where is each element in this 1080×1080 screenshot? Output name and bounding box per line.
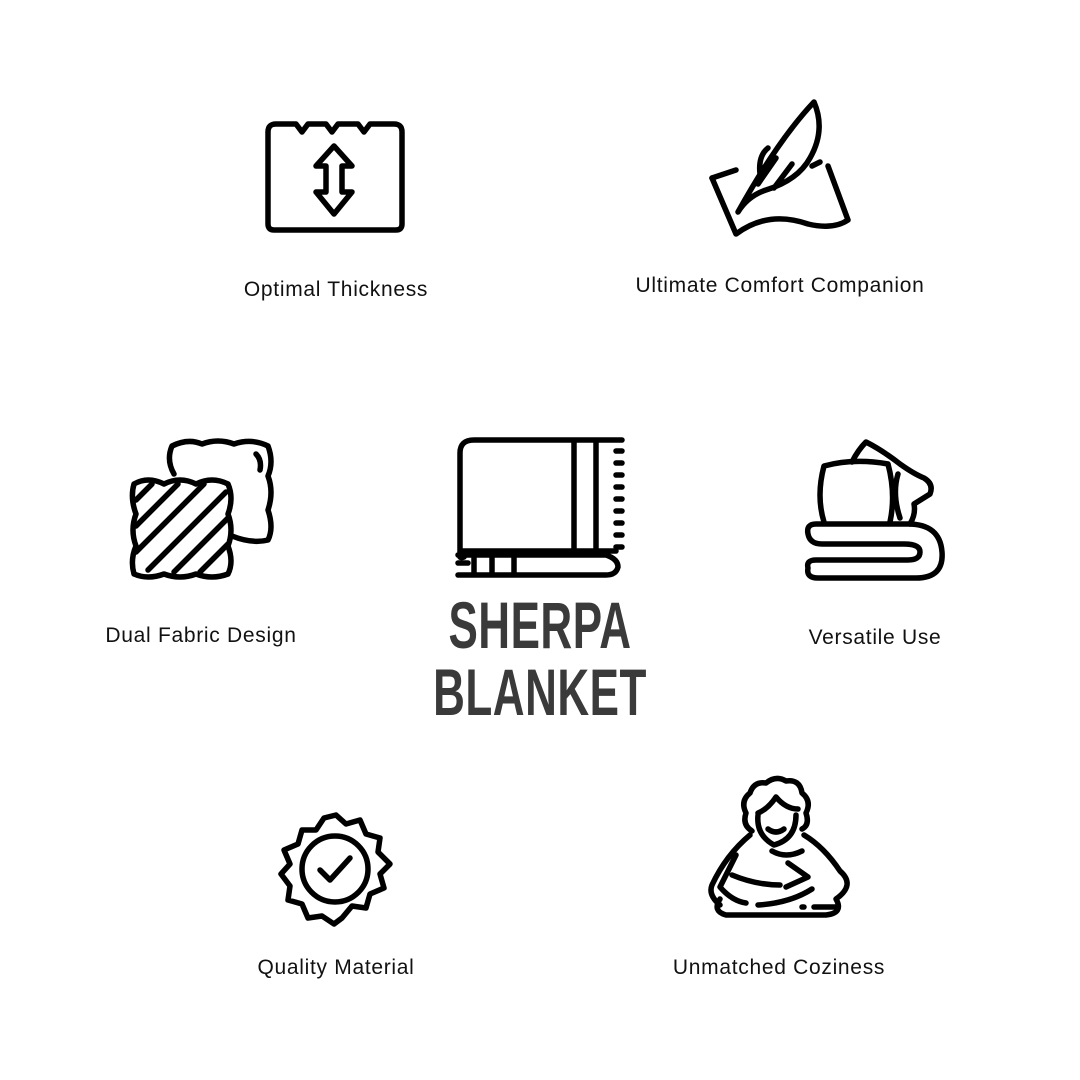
center: blanket icon xyxy=(455,437,625,578)
title: BLANKET: BLANKET xyxy=(433,656,647,730)
icon: coziness person xyxy=(708,776,850,918)
label: Dual Fabric Design: Dual Fabric Design xyxy=(105,624,297,647)
label: Quality Material: Quality Material xyxy=(257,956,415,979)
label: Optimal Thickness: Optimal Thickness xyxy=(244,278,428,301)
icon: quality badge xyxy=(278,812,393,927)
label: Unmatched Coziness: Unmatched Coziness xyxy=(673,956,885,979)
label: Versatile Use: Versatile Use xyxy=(809,626,941,649)
icon: dual fabric xyxy=(130,438,274,580)
label: Ultimate Comfort Companion: Ultimate Comfort Companion xyxy=(636,274,924,297)
title: SHERPA: SHERPA xyxy=(448,590,632,663)
icon: versatile use xyxy=(804,439,945,581)
icon: thickness xyxy=(265,121,405,233)
icon: feather xyxy=(709,99,851,237)
